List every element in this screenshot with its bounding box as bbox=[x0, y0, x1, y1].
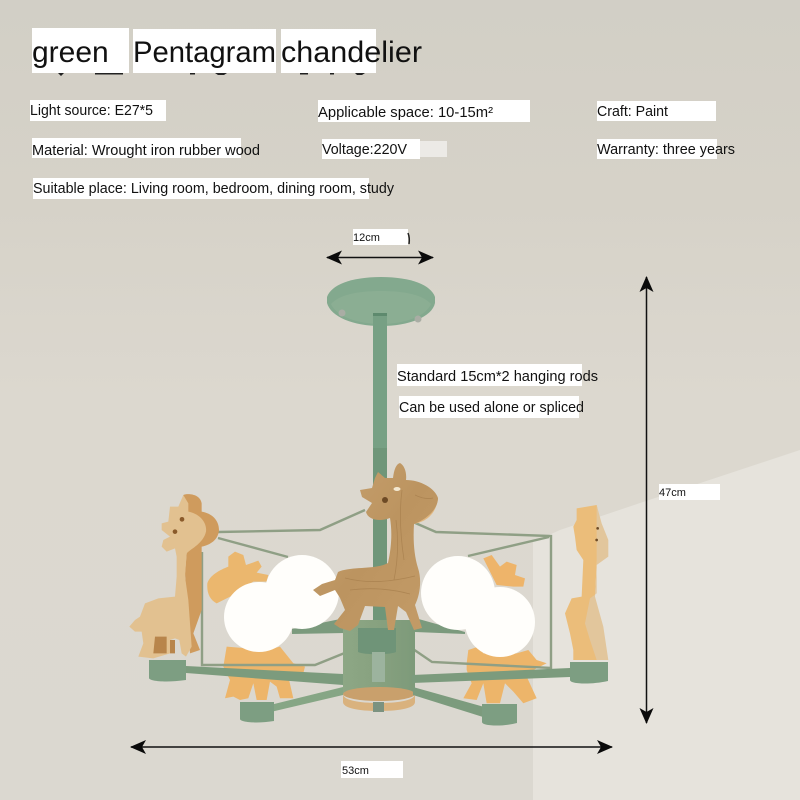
dimension: width 53cm bbox=[131, 747, 612, 778]
title: green bbox=[32, 36, 109, 69]
note: hanging rods bbox=[397, 364, 598, 418]
dimension: height 47cm bbox=[646, 277, 720, 723]
globe bulbs bbox=[224, 555, 535, 657]
chandelier bbox=[129, 277, 608, 726]
specification list: Light source: E27*5 bbox=[30, 103, 153, 119]
hanging rod bbox=[373, 313, 387, 638]
dimension: width 53cm: 53cm bbox=[342, 765, 369, 777]
specification list: Voltage:220V bbox=[322, 142, 407, 158]
specification list: Warranty: three years bbox=[597, 142, 735, 158]
wire frame bbox=[202, 510, 551, 668]
rear arms bbox=[292, 618, 465, 634]
specification list bbox=[30, 100, 735, 199]
title: Pentagram bbox=[133, 36, 276, 69]
title: chandelier bbox=[281, 36, 422, 69]
title bbox=[32, 28, 422, 76]
dimension: height 47cm: 47cm bbox=[659, 487, 686, 499]
left giraffe bbox=[129, 494, 219, 658]
central cylinder bbox=[343, 620, 415, 712]
ceiling canopy bbox=[327, 277, 435, 326]
note: hanging rods: Can be used alone or spliced bbox=[399, 400, 584, 416]
back left giraffe bbox=[207, 552, 305, 700]
specification list: Material: Wrought iron rubber wood bbox=[32, 143, 260, 159]
back right giraffe bbox=[463, 555, 547, 703]
note: hanging rods: Standard 15cm*2 hanging rods bbox=[397, 369, 598, 385]
dimension: canopy width 12cm: 12cm bbox=[353, 232, 380, 244]
specification list: Craft: Paint bbox=[597, 104, 668, 120]
specification list: Applicable space: 10-15m² bbox=[318, 105, 493, 121]
right giraffe bbox=[565, 505, 608, 660]
arm end cups bbox=[149, 660, 608, 726]
center giraffe bbox=[313, 463, 438, 631]
specification list: Suitable place: Living room, bedroom, dining room, study bbox=[33, 181, 395, 197]
dimension: canopy width 12cm bbox=[327, 229, 433, 258]
light arms bbox=[186, 666, 570, 717]
